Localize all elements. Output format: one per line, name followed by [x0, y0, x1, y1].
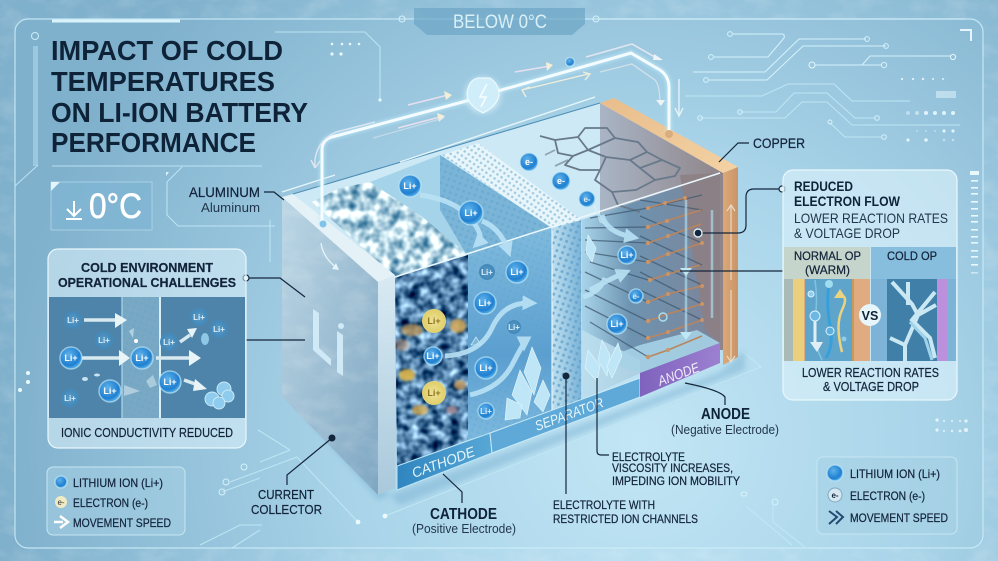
lithium ions and electrons: Li+ — [510, 267, 524, 277]
heading — [794, 179, 948, 241]
ion conduction diagram: Li+ — [98, 336, 110, 345]
heading: REDUCED — [794, 179, 853, 194]
electron flow wire — [311, 44, 683, 228]
title: PERFORMANCE — [51, 127, 256, 158]
floor shadow — [300, 350, 745, 505]
label: copper: COPPER — [753, 135, 805, 151]
heading — [58, 260, 236, 290]
legend right — [817, 457, 957, 534]
lithium ions and electrons: Li+ — [427, 388, 441, 398]
bottom labels: ANODE — [655, 359, 702, 389]
title: TEMPERATURES — [51, 66, 275, 97]
lithium ions and electrons: Li+ — [403, 181, 417, 191]
lithium ions and electrons: Li+ — [478, 298, 492, 308]
below 0°C banner — [414, 8, 585, 35]
lithium ions and electrons: Li+ — [426, 351, 440, 361]
ion conduction diagram: Li+ — [67, 316, 79, 325]
bottom labels: CATHODE — [410, 443, 478, 481]
ion conduction diagram: Li+ — [135, 353, 149, 363]
icon: lithium ion — [55, 476, 67, 488]
lithium ions and electrons: Li+ — [620, 250, 634, 260]
legend right: ELECTRON (e-) — [850, 489, 925, 503]
caption: & VOLTAGE DROP — [823, 379, 919, 394]
copper current collector — [600, 98, 738, 365]
column: cold op: COLD OP — [887, 249, 937, 263]
ice cluster — [205, 382, 234, 409]
title: IMPACT OF COLD — [51, 35, 283, 66]
ion flow arrows — [420, 195, 632, 395]
label: current collector — [251, 434, 336, 517]
heading: LOWER REACTION RATES — [794, 210, 948, 226]
separator front mesh — [552, 220, 582, 410]
caption: IONIC CONDUCTIVITY REDUCED — [61, 426, 233, 440]
lithium ions and electrons: Li+ — [464, 208, 478, 218]
ion conduction diagram: Li+ — [193, 313, 205, 322]
label: cathode: CATHODE — [430, 506, 497, 523]
label: current collector: COLLECTOR — [251, 502, 322, 517]
legend right: MOVEMENT SPEED — [850, 511, 948, 525]
label: anode: (Negative Electrode) — [671, 422, 779, 437]
interior back glass — [293, 103, 600, 277]
label: electrolyte channels: RESTRICTED ION CHANNELS — [553, 512, 698, 526]
ion conduction diagram: Li+ — [213, 325, 225, 334]
title: ON LI-ION BATTERY — [51, 97, 308, 128]
heading: ELECTRON FLOW — [794, 194, 900, 209]
icon: electron: e- — [57, 498, 65, 507]
heading: & VOLTAGE DROP — [794, 225, 900, 241]
column: normal op — [784, 247, 870, 361]
label: aluminum — [189, 185, 284, 215]
panel: reduced electron flow — [783, 170, 957, 400]
icon: electron: e- — [831, 491, 839, 500]
vs badge: VS — [862, 309, 878, 323]
below 0°C banner: BELOW 0°C — [453, 12, 547, 33]
label: aluminum: ALUMINUM — [189, 185, 260, 200]
legend right: LITHIUM ION (Li+) — [850, 467, 940, 481]
bottom labels: SEPARATOR — [533, 394, 606, 434]
separator top mesh — [442, 143, 582, 228]
label: copper — [719, 135, 805, 162]
ion conduction diagram — [49, 297, 245, 418]
panel: cold environment challenges — [48, 249, 246, 448]
lithium ions and electrons: e- — [632, 292, 640, 301]
heading: OPERATIONAL CHALLENGES — [58, 275, 236, 290]
legend left — [47, 467, 185, 535]
label: electrolyte channels — [553, 372, 698, 526]
anode region — [582, 173, 720, 399]
lithium ions and electrons: Li+ — [479, 363, 493, 373]
lithium ions and electrons: e- — [557, 176, 565, 186]
vs badge — [859, 304, 881, 326]
ion conduction diagram: Li+ — [103, 386, 117, 396]
Li embossed mark — [313, 309, 344, 376]
lithium ions and electrons: Li+ — [427, 316, 441, 326]
label: anode: ANODE — [701, 406, 750, 423]
legend left: LITHIUM ION (Li+) — [73, 476, 163, 490]
column: cold op — [871, 247, 956, 361]
label: cathode: (Positive Electrode) — [412, 521, 516, 536]
lithium ions and electrons — [399, 58, 643, 419]
legend left: MOVEMENT SPEED — [73, 516, 171, 530]
caption: LOWER REACTION RATES — [802, 365, 939, 380]
icon: speed chevrons — [829, 511, 843, 524]
lithium ions and electrons: Li+ — [508, 323, 520, 332]
leaders to side panels — [243, 186, 785, 340]
heading: COLD ENVIRONMENT — [81, 260, 213, 275]
label: electrolyte viscosity: VISCOSITY INCREASES, — [612, 461, 733, 475]
lithium ions and electrons: e- — [525, 157, 533, 167]
circuit traces top right — [599, 19, 965, 142]
lithium ions and electrons: e- — [583, 195, 591, 204]
column: normal op: NORMAL OP — [794, 249, 861, 263]
label: electrolyte viscosity — [597, 378, 740, 488]
aluminum current collector — [280, 194, 395, 497]
column: normal op: (WARM) — [805, 263, 850, 277]
caption — [802, 365, 939, 394]
cathode active material — [312, 182, 468, 466]
anode layered rods — [585, 195, 712, 359]
ion conduction diagram: Li+ — [163, 377, 177, 387]
label: aluminum: Aluminum — [201, 200, 260, 215]
icon: lithium ion — [827, 465, 843, 481]
glass top front edge — [395, 173, 720, 277]
temperature badge: 0°C — [89, 187, 142, 226]
electrolyte panel — [468, 228, 552, 440]
title — [51, 35, 308, 158]
temperature badge — [51, 182, 152, 230]
label: cathode — [412, 474, 516, 536]
ion conduction diagram: Li+ — [64, 394, 76, 403]
lithium ions and electrons: Li+ — [610, 319, 624, 329]
label: electrolyte viscosity: IMPEDING ION MOBILITY — [612, 474, 740, 488]
ion conduction diagram: Li+ — [64, 353, 78, 363]
lithium ions and electrons: Li+ — [481, 268, 493, 277]
copper back wall — [600, 103, 723, 350]
label: current collector: CURRENT — [258, 487, 314, 502]
label: electrolyte channels: ELECTROLYTE WITH — [553, 498, 655, 512]
label: electrolyte viscosity: ELECTROLYTE — [612, 450, 685, 464]
icon: speed arrow — [54, 516, 68, 528]
lithium ions and electrons: Li+ — [480, 407, 492, 416]
label: anode — [671, 383, 779, 437]
ion conduction diagram: Li+ — [163, 338, 175, 347]
bottom labels — [397, 343, 720, 490]
ice crystals — [471, 205, 622, 420]
legend left: ELECTRON (e-) — [73, 496, 148, 510]
battery cell — [280, 58, 745, 505]
icon: ice bolt — [465, 77, 501, 113]
graphene lattice — [540, 128, 680, 212]
